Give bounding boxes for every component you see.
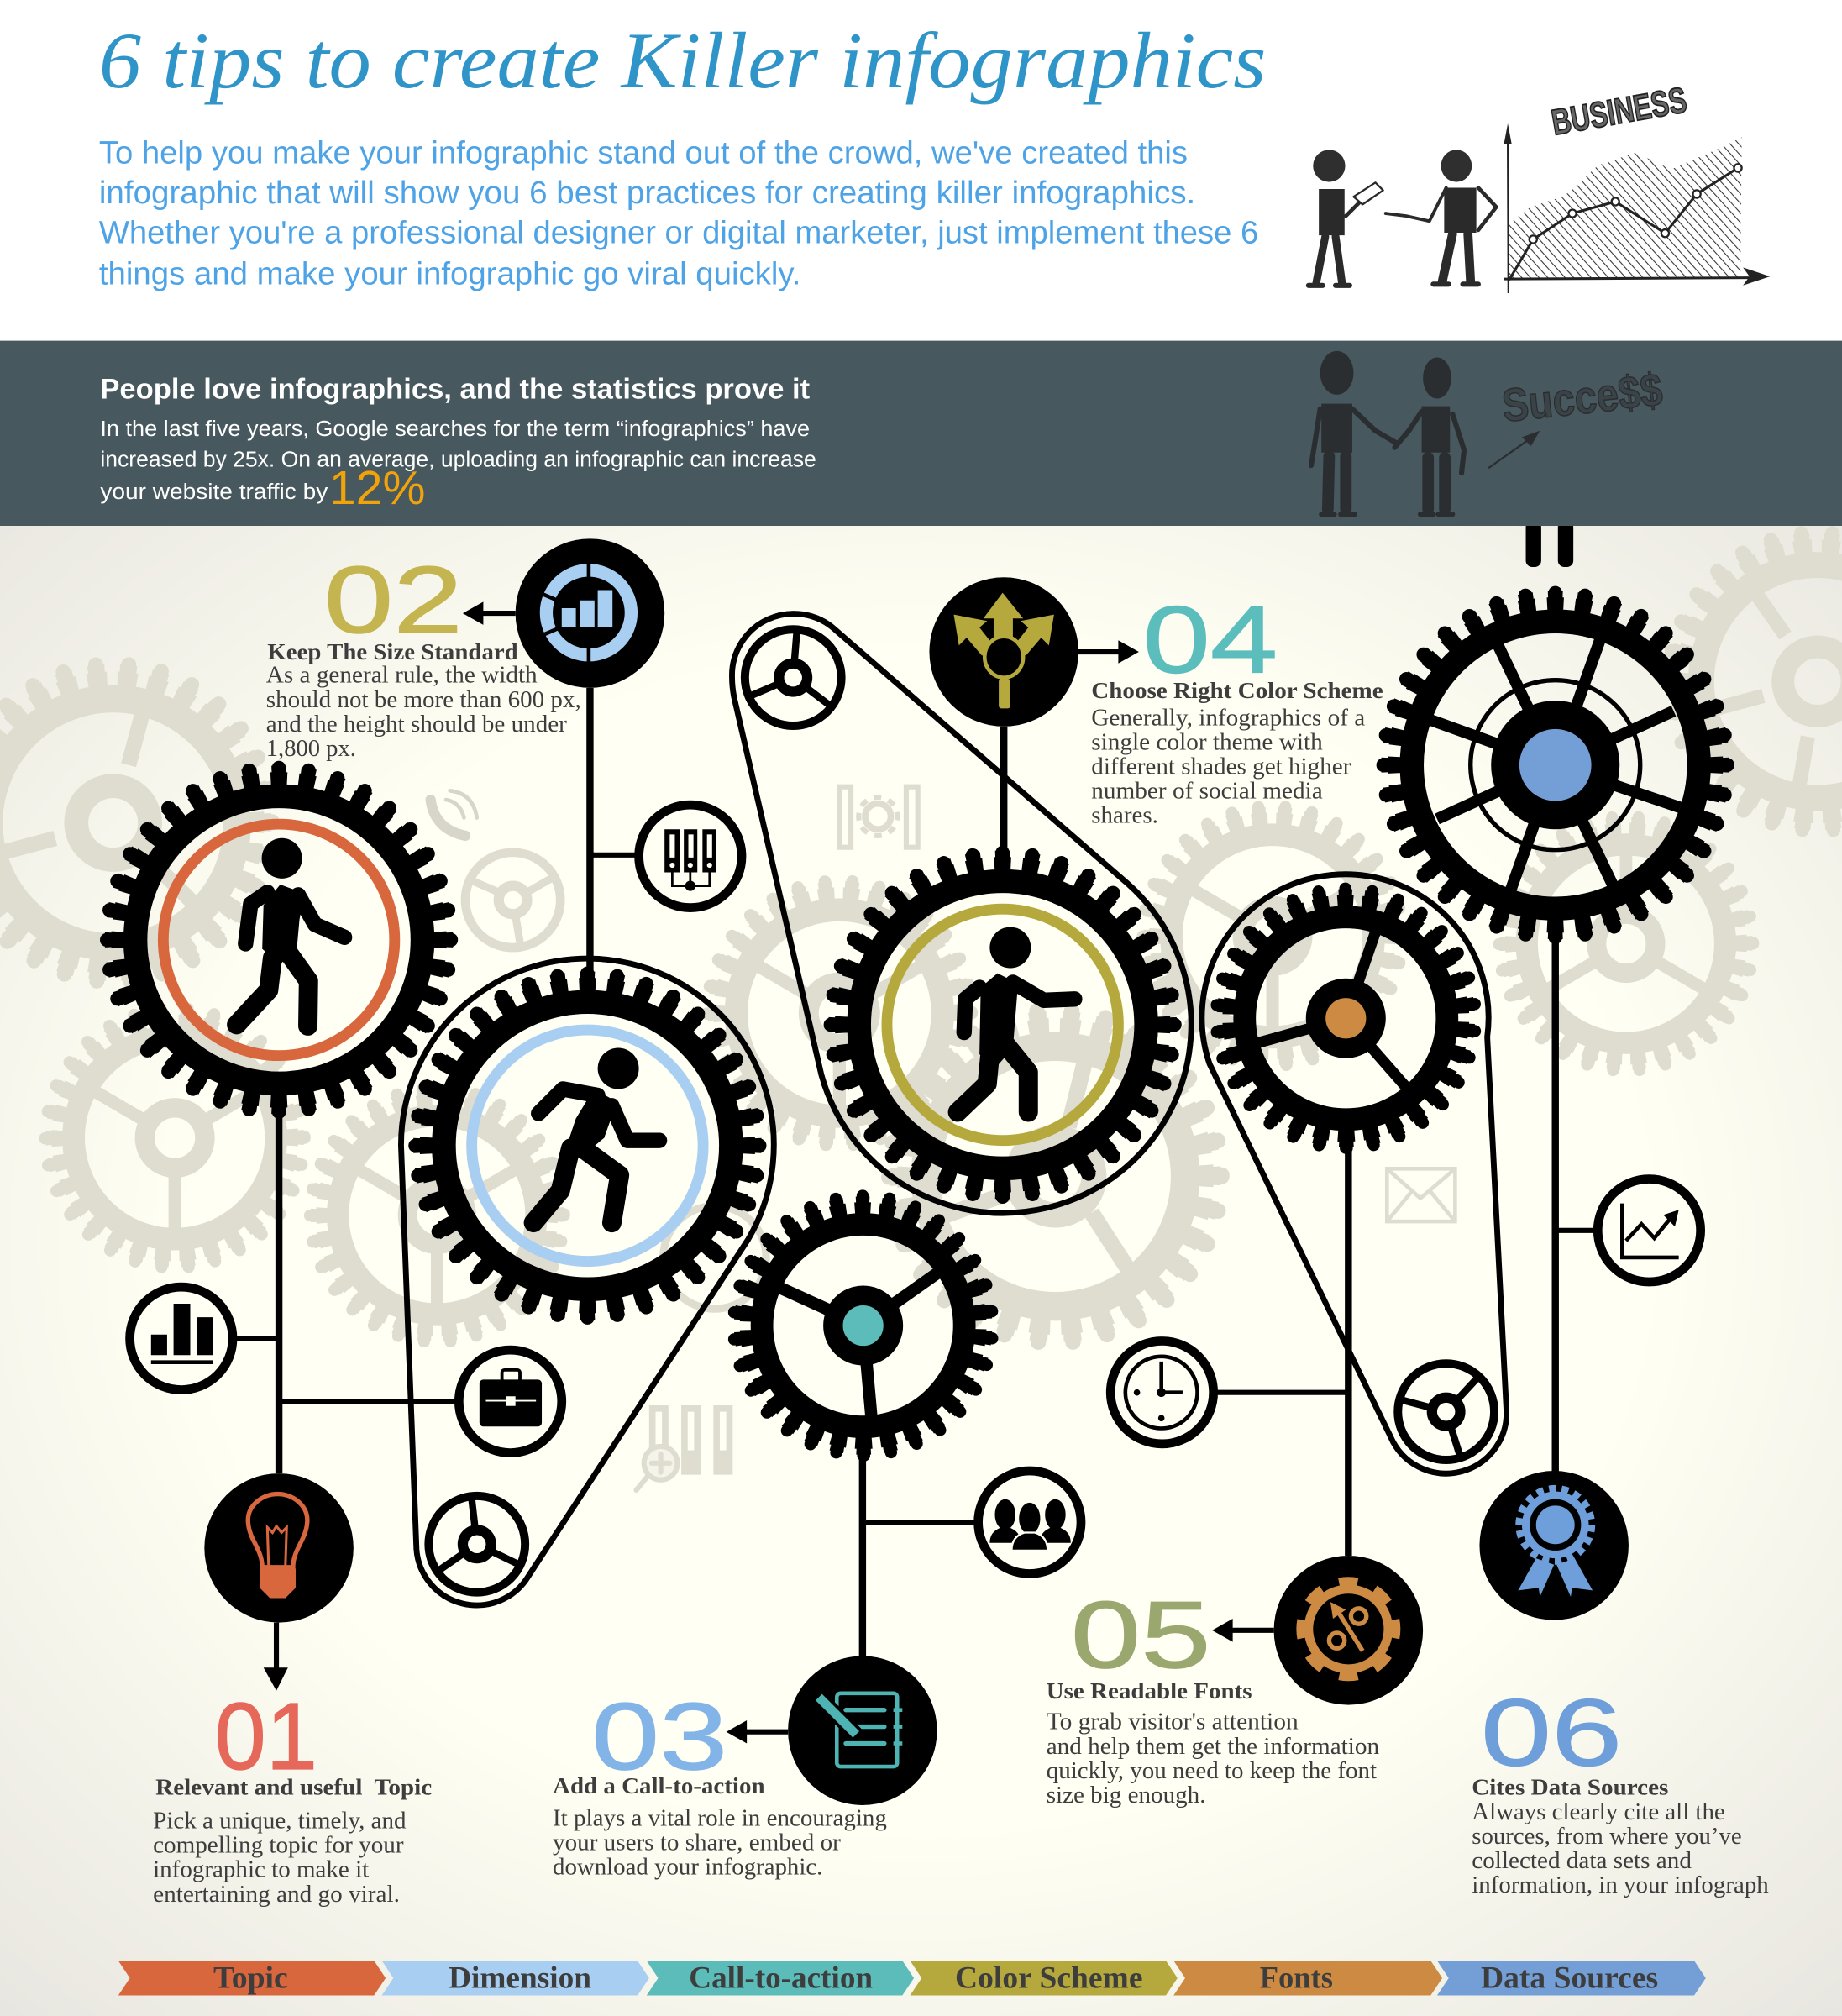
- stub lines above top right gear: [1517, 508, 1581, 567]
- body 04: single color theme with: [1091, 729, 1323, 755]
- chevron: Fonts: Fonts: [1260, 1960, 1333, 1994]
- chevron: Call-to-action: [647, 1960, 914, 1996]
- icon: donut and bars: [516, 538, 664, 688]
- chevron: Data Sources: [1437, 1960, 1706, 1996]
- icon: faded phone: [431, 790, 477, 836]
- tip 06: [1472, 1679, 1769, 1898]
- chevron: Dimension: Dimension: [449, 1960, 591, 1994]
- panel: gear diagram background: [0, 526, 1842, 2016]
- icon: faded envelope: [1387, 1168, 1455, 1221]
- chevron bar: [118, 1960, 1706, 1996]
- body 04: [1091, 705, 1366, 829]
- chevron: Color Scheme: [910, 1960, 1178, 1996]
- arrow: to 02: [463, 601, 516, 625]
- body 05: quickly, you need to keep the font: [1047, 1758, 1377, 1784]
- gear: large blue hub: [1383, 593, 1728, 937]
- connector lines: [237, 688, 1594, 1658]
- heading 03: Add a Call-to-action: [553, 1772, 765, 1798]
- icon: gear with percent: [1274, 1556, 1423, 1705]
- arrow: to 05: [1212, 1619, 1274, 1642]
- header background: [0, 0, 1842, 341]
- heading 05: Use Readable Fonts: [1047, 1677, 1252, 1704]
- tip 05: [1047, 1581, 1379, 1809]
- intro text block: things and make your infographic go viral quickly.: [99, 255, 800, 291]
- body 05: size big enough.: [1047, 1782, 1205, 1809]
- body 03: your users to share, embed or: [553, 1830, 842, 1856]
- number 06: 06: [1481, 1679, 1622, 1786]
- body 06: Always clearly cite all the: [1472, 1799, 1725, 1825]
- body 02: As a general rule, the width: [266, 663, 538, 689]
- icon: clock: [1110, 1341, 1214, 1444]
- stats text: In the last five years, Google searches for the term “infographics” have: [100, 416, 810, 441]
- intro text block: To help you make your infographic stand out of the crowd, we've created this: [99, 134, 1188, 171]
- panel: statistics band: [0, 341, 1842, 526]
- illustration: handshake sketch: [1311, 351, 1665, 514]
- chevron: Topic: [118, 1960, 386, 1996]
- stats text: increased by 25x. On an average, uploading an infographic can increase: [100, 447, 816, 472]
- tip 01: [153, 1683, 432, 1908]
- number 03: 03: [591, 1683, 727, 1789]
- number 01: 01: [215, 1683, 317, 1789]
- tip 02: [266, 546, 581, 762]
- icon: faded binders and magnifier: [637, 1405, 732, 1490]
- body 01: compelling topic for your: [153, 1833, 404, 1859]
- body 06: [1472, 1799, 1769, 1898]
- illustration: business people and chart sketch: [1309, 80, 1770, 293]
- body 03: download your infographic.: [553, 1855, 822, 1881]
- icon: binders: [639, 805, 742, 908]
- title: 6 tips to create Killer infographics: [99, 16, 1266, 105]
- illustration: business people and chart sketch: BUSINESS: [1549, 80, 1690, 144]
- number 05: 05: [1071, 1581, 1211, 1688]
- pulley: right: [1398, 1363, 1494, 1460]
- icon: briefcase: [459, 1350, 562, 1453]
- body 02: [266, 663, 581, 762]
- body 02: 1,800 px.: [266, 736, 356, 762]
- gear: orange hub: [1216, 889, 1476, 1148]
- stats text: 12%: [329, 461, 426, 514]
- arrow: to 01: [264, 1623, 288, 1691]
- body 05: To grab visitor's attention: [1047, 1709, 1299, 1735]
- heading 01: Relevant and useful Topic: [155, 1774, 432, 1800]
- body 05: and help them get the information: [1047, 1734, 1379, 1760]
- icon: bar chart: [130, 1287, 233, 1390]
- tip 04: [1091, 586, 1383, 829]
- body 04: shares.: [1091, 803, 1158, 829]
- body 01: [153, 1809, 407, 1908]
- icon: people: [979, 1471, 1081, 1573]
- body 04: Generally, infographics of a: [1091, 705, 1366, 731]
- intro text block: [99, 134, 1258, 291]
- stats heading: People love infographics, and the statistics prove it: [100, 373, 811, 405]
- intro text block: Whether you're a professional designer or digital marketer, just implement these 6: [99, 214, 1258, 250]
- icon: faded binders and gear: [839, 787, 918, 848]
- arrow: to 03: [727, 1720, 788, 1744]
- background faded gears: [0, 532, 1842, 1343]
- body 03: [553, 1805, 887, 1881]
- body 02: should not be more than 600 px,: [266, 687, 581, 713]
- chevron: Dimension: [382, 1960, 649, 1996]
- gear: walker olive: [831, 853, 1175, 1197]
- body 02: and the height should be under: [266, 711, 568, 738]
- pulley: top: [745, 629, 842, 726]
- icon: light bulb: [204, 1473, 354, 1623]
- body 01: infographic to make it: [153, 1857, 369, 1883]
- gear: runner blue: [415, 974, 759, 1318]
- chevron: Topic: Topic: [213, 1960, 288, 1994]
- number 02: 02: [324, 546, 463, 653]
- icon: notes and pencil: [788, 1656, 937, 1805]
- heading 02: Keep The Size Standard: [267, 638, 518, 664]
- intro text block: infographic that will show you 6 best practices for creating killer infographics.: [99, 175, 1195, 211]
- chevron: Fonts: [1173, 1960, 1442, 1996]
- gear: teal hub: [733, 1195, 993, 1456]
- body 06: sources, from where you’ve: [1472, 1824, 1742, 1850]
- body 04: number of social media: [1091, 779, 1323, 805]
- chevron: Call-to-action: Call-to-action: [689, 1960, 873, 1994]
- number 04: 04: [1142, 586, 1278, 693]
- heading 06: Cites Data Sources: [1472, 1774, 1669, 1800]
- body 04: different shades get higher: [1091, 753, 1351, 780]
- belt: gear 2 to pulley: [401, 958, 774, 1605]
- tip 03: [553, 1683, 887, 1881]
- chevron: Data Sources: Data Sources: [1481, 1960, 1658, 1994]
- arrow: to 04: [1078, 640, 1139, 664]
- heading 04: Choose Right Color Scheme: [1091, 677, 1383, 703]
- body 01: Pick a unique, timely, and: [153, 1809, 407, 1835]
- belt: gear 3 to pulley: [732, 614, 1191, 1213]
- pulley: bottom left: [428, 1496, 525, 1593]
- icon: award ribbon: [1479, 1471, 1629, 1620]
- body 06: information, in your infograph: [1472, 1872, 1769, 1898]
- icon: trend chart: [1598, 1179, 1701, 1282]
- body 05: [1047, 1709, 1379, 1809]
- illustration: handshake sketch: Succe$$: [1499, 363, 1665, 432]
- chevron: Color Scheme: Color Scheme: [955, 1960, 1142, 1994]
- stats text: your website traffic by: [100, 479, 328, 504]
- body 03: It plays a vital role in encouraging: [553, 1805, 887, 1831]
- gear: walker orange: [107, 768, 451, 1112]
- stats text: [100, 416, 816, 514]
- body 06: collected data sets and: [1472, 1848, 1692, 1874]
- icon: three arrows and magnifier: [929, 577, 1078, 727]
- belt: gear 5 to pulley: [1202, 874, 1507, 1473]
- body 01: entertaining and go viral.: [153, 1882, 400, 1908]
